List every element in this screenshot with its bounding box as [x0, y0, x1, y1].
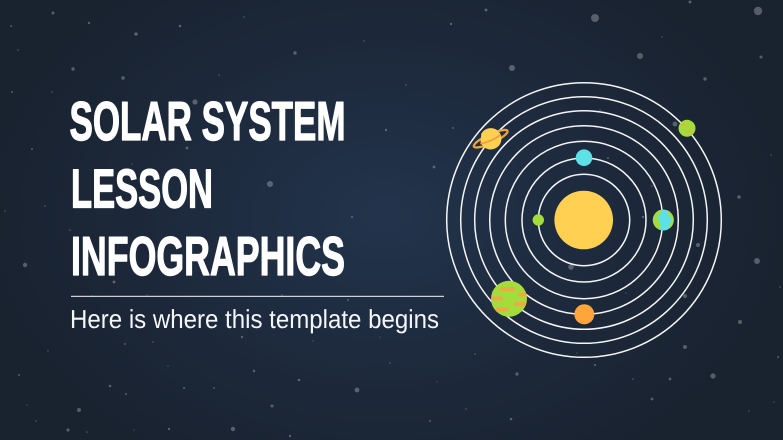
sun [554, 191, 613, 249]
title [70, 90, 346, 287]
planet: orange [574, 304, 594, 324]
divider line [71, 296, 444, 297]
subtitle: Here is where this template begins [70, 304, 439, 334]
solar system diagram [447, 83, 721, 357]
planet: earth [652, 210, 674, 230]
planet: top right green [678, 120, 696, 137]
orbits [447, 83, 721, 357]
planet: cyan [576, 149, 592, 166]
planet: striped green giant [491, 281, 528, 317]
title: LESSON [71, 158, 213, 220]
planet: ringed saturn [472, 127, 509, 151]
title: SOLAR SYSTEM [70, 90, 346, 152]
planet: small green [533, 214, 544, 226]
title: INFOGRAPHICS [71, 225, 345, 287]
